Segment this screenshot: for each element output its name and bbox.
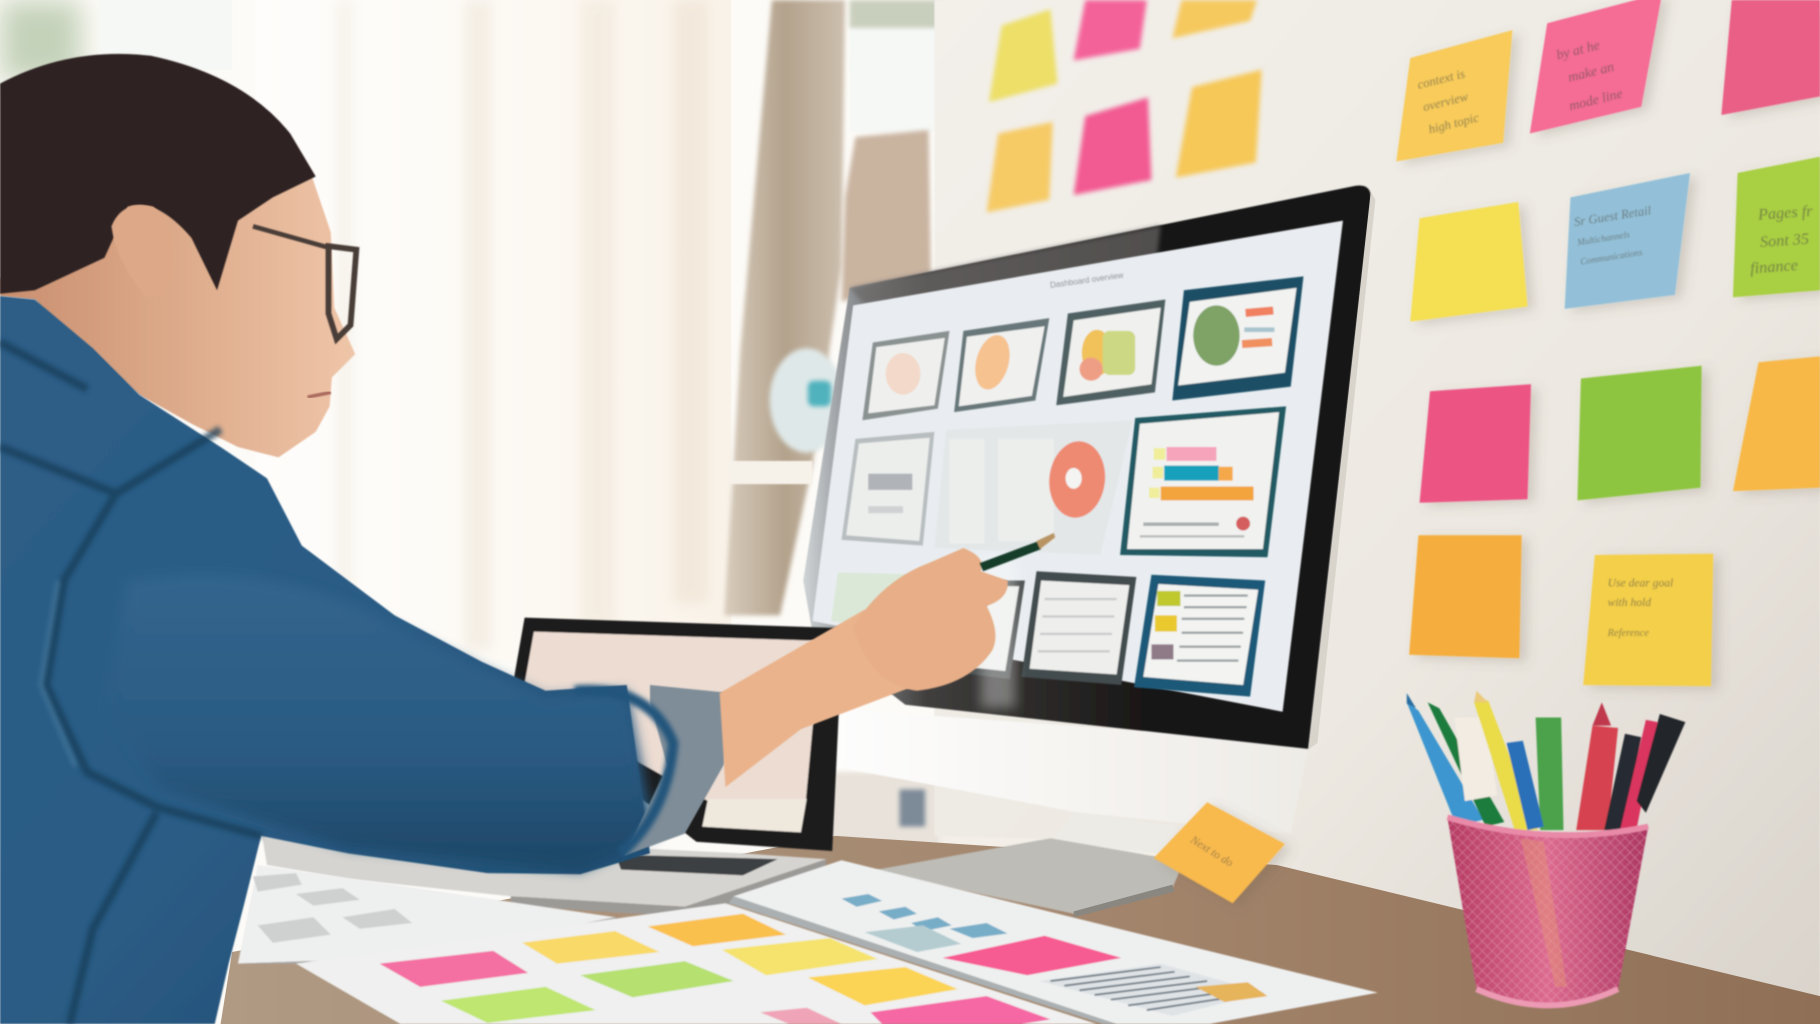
monitor stand [871,813,1184,917]
note: pink middle [1420,384,1531,503]
window pane [850,26,940,132]
note: yellow [1410,202,1528,322]
screen header text: Dashboard overview [1049,271,1124,290]
handwriting on yellow lower note: Reference [1607,628,1649,639]
panel 3 [1056,300,1165,405]
blurred upper cluster [987,0,1262,212]
wall [934,0,1820,998]
note: yellow lower [1583,554,1713,686]
handwriting on blue note [1572,203,1659,268]
sticky note on right paper [942,936,1121,975]
handwriting on blue note: Sr Guest Retail [1573,203,1653,229]
right paper [734,860,1378,1024]
main paper [296,903,1097,1024]
handwriting on orange note: context is [1416,66,1466,92]
handwriting on green note: Sont 35 [1759,230,1810,251]
handwriting on blue note: Communications [1580,248,1644,268]
note: green middle [1577,366,1702,500]
panel 9 [946,580,1025,679]
left paper [238,865,615,964]
sticky notes on main paper [380,914,1050,1024]
handwriting on yellow lower note: with hold [1608,596,1651,609]
handwriting on pink note: by at he [1555,38,1602,64]
handwriting on blue note: Multichannels [1576,230,1631,249]
mouth [308,392,331,397]
rolled cuff [624,685,731,856]
note: orange lower [1409,535,1522,658]
pencil [980,533,1055,571]
forearm [720,610,917,787]
jacket seams [0,342,261,1024]
sticky notes on the wall [987,0,1820,686]
laptop [261,618,843,917]
person [0,54,1055,1024]
handwriting on orange note: overview [1421,89,1470,114]
curtain drape [724,0,845,615]
wireframe sketch [1039,964,1268,1016]
hand [853,548,1008,691]
papers on the desk [238,860,1378,1024]
jacket arm highlight [104,575,656,871]
panel 7 [1120,406,1286,557]
note: orange top [1396,30,1512,161]
panel 6 [934,420,1133,555]
hair [0,54,316,294]
bar chart [1140,447,1254,538]
panel 5 [842,432,934,546]
window sill [729,461,812,484]
seam highlight [41,580,75,766]
panel 2 [954,318,1049,412]
dashboard panels [831,276,1303,697]
handwriting on orange note: high topic [1427,111,1481,137]
monitor [783,185,1375,834]
handwriting on yellow lower note [1607,576,1673,639]
note: orange right [1733,356,1820,491]
donut chart [1045,438,1109,521]
handwriting on pink note: make an [1567,60,1616,86]
pen holder [1407,691,1685,1005]
glasses [253,226,356,339]
pencils [1407,691,1685,830]
lower window area [812,772,940,848]
note stuck on monitor: Next to do [1187,833,1236,870]
panel 1 [862,331,949,420]
ear [111,205,174,298]
handwriting on green note [1746,202,1818,278]
note: pink top [1530,0,1662,134]
note: blue [1565,173,1690,309]
mesh cup [1447,817,1648,1005]
neck and face [0,139,355,457]
handwriting on pink note: mode line [1568,87,1624,114]
handwriting on orange note [1416,66,1481,137]
laptop keyboard [615,854,778,875]
panel 10 [1021,571,1136,685]
desk [221,836,1820,1024]
laptop base [261,830,826,907]
handwriting on pink note [1555,36,1624,114]
panel 4 [1172,276,1303,401]
note: green top [1733,157,1820,297]
handwriting on green note: Pages fr [1756,202,1814,224]
monitor bezel [803,185,1371,749]
colour swatches [842,894,1008,938]
handwriting on yellow lower note: Use dear goal [1608,576,1673,589]
monitor chin [783,708,1309,834]
panel 11 [1134,575,1265,697]
panel 8 [831,572,929,633]
screen glare [981,557,1016,708]
laptop lid [511,618,843,851]
paper divider [729,896,1117,1024]
note stuck on monitor [1154,802,1285,903]
monitor screen [812,221,1343,712]
handwriting on green note: finance [1750,256,1799,278]
window and curtains background [0,0,940,1024]
note: pink right [1721,0,1820,115]
jacket body [0,296,650,1024]
globe ornament [770,348,844,453]
shelf object [842,130,931,302]
